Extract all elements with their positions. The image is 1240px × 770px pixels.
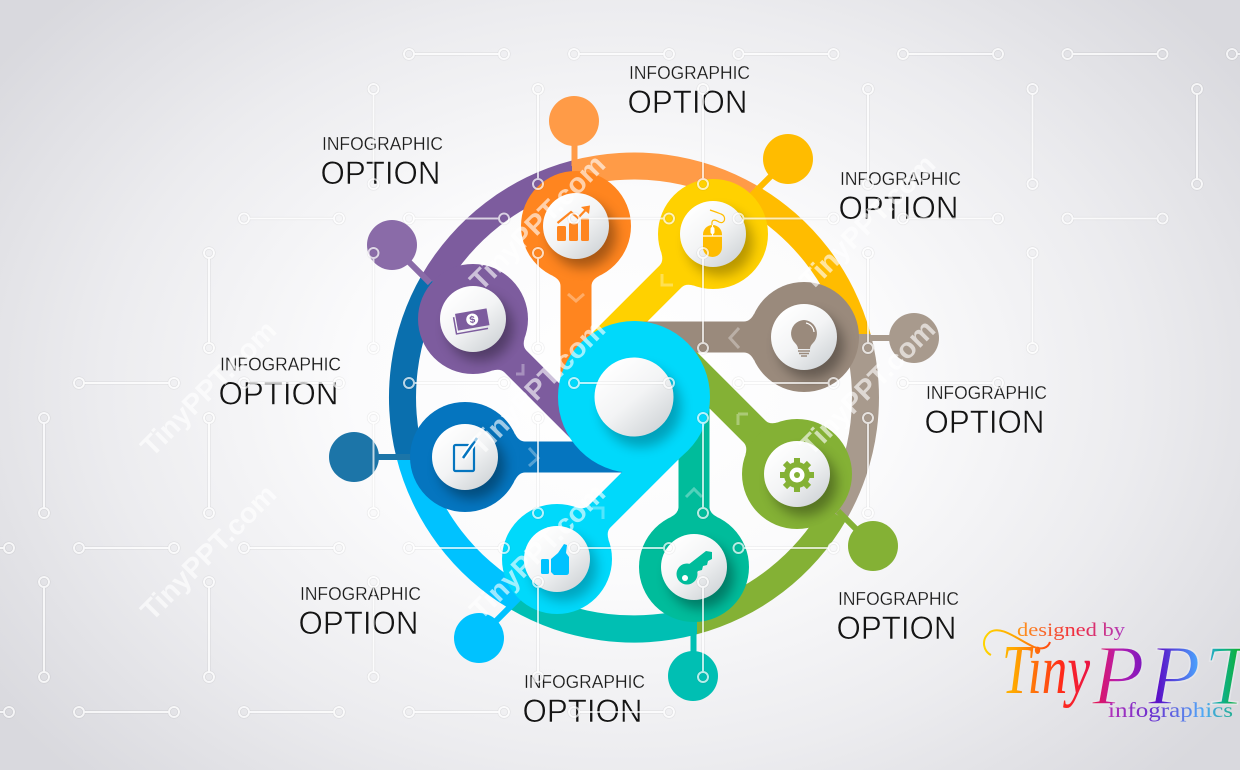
icon: bar chart with arrow [557, 206, 590, 241]
label: upper left: INFOGRAPHIC [322, 134, 443, 154]
node: green gear [696, 352, 852, 529]
watermarks: TinyPPT.com [463, 148, 611, 296]
label: upper right: OPTION [838, 190, 958, 226]
ring segment: orange [572, 153, 756, 209]
node: teal key [639, 407, 749, 622]
label: lower right: INFOGRAPHIC [838, 589, 959, 609]
label: top: INFOGRAPHIC [629, 63, 750, 83]
icon: note and pen [454, 438, 477, 471]
terminal: light blue [454, 597, 520, 663]
node: dark blue note [410, 402, 623, 512]
icon: money: $ [469, 314, 477, 326]
centre white disc [594, 358, 674, 436]
icon: thumbs up [541, 544, 569, 575]
icon: gear [780, 458, 814, 492]
terminal: taupe [850, 313, 939, 363]
node: purple money [418, 264, 570, 438]
label: left [218, 354, 341, 412]
ring segment: green [697, 506, 846, 634]
terminal: teal [668, 625, 718, 701]
logo: designed by TinyPPT infographics: infographics [1108, 698, 1233, 722]
logo: designed by TinyPPT infographics: P [1147, 627, 1201, 723]
label: bottom [522, 672, 645, 729]
node: yellow mouse [590, 179, 768, 336]
label: upper right [838, 169, 961, 226]
terminal: orange [549, 96, 599, 166]
central hub [558, 321, 710, 473]
terminal: amber [750, 134, 813, 197]
watermarks: TinyPPT.com [793, 148, 941, 296]
watermarks [134, 148, 941, 626]
ring segment: amber [743, 185, 871, 334]
label: bottom: OPTION [522, 693, 642, 729]
label: lower left: INFOGRAPHIC [300, 584, 421, 604]
watermarks: TinyPPT.com [793, 313, 941, 461]
label: right: OPTION [924, 404, 1044, 440]
label: upper left [320, 134, 443, 191]
node: taupe bulb [640, 282, 859, 392]
label: left: OPTION [218, 376, 338, 412]
label: top: OPTION [628, 84, 748, 120]
label: lower right: OPTION [836, 610, 956, 646]
label: upper right: INFOGRAPHIC [840, 169, 961, 189]
logo: designed by TinyPPT infographics: Tiny [1002, 632, 1091, 709]
outer ring [389, 153, 879, 643]
label: lower left [298, 584, 421, 641]
node: orange chart [521, 171, 631, 400]
terminal: purple [367, 220, 430, 283]
icon: money [453, 308, 490, 334]
watermarks: TinyPPT.com [463, 313, 611, 461]
label: left: INFOGRAPHIC [220, 354, 341, 374]
terminal: dark blue [329, 432, 420, 482]
ring segment: teal [510, 586, 697, 643]
label: right: INFOGRAPHIC [926, 383, 1047, 403]
watermarks: TinyPPT.com [463, 477, 611, 625]
label: lower left: OPTION [298, 605, 418, 641]
watermarks: TinyPPT.com [134, 314, 282, 462]
ring segment: dark blue [389, 275, 445, 457]
icon: key [676, 551, 712, 584]
label: top [628, 63, 750, 120]
chevron marks on stems [516, 274, 748, 519]
label: upper left: OPTION [320, 155, 440, 191]
label: bottom: INFOGRAPHIC [524, 672, 645, 692]
label: lower right [836, 589, 959, 646]
node: cyan thumb [502, 454, 684, 614]
icon: computer mouse [703, 210, 725, 257]
icon: light bulb [791, 320, 817, 356]
logo: designed by TinyPPT infographics: designed by [1017, 621, 1126, 641]
ring segment: light blue [396, 457, 524, 609]
ring segment: taupe [823, 334, 879, 520]
terminal dots and connectors [329, 96, 939, 701]
logo: designed by TinyPPT infographics [984, 621, 1240, 723]
terminal: green [838, 511, 898, 571]
ring segment: purple [422, 160, 572, 288]
label: right [924, 383, 1047, 440]
logo: designed by TinyPPT infographics: P [1091, 627, 1145, 723]
watermarks: TinyPPT.com [134, 478, 282, 626]
